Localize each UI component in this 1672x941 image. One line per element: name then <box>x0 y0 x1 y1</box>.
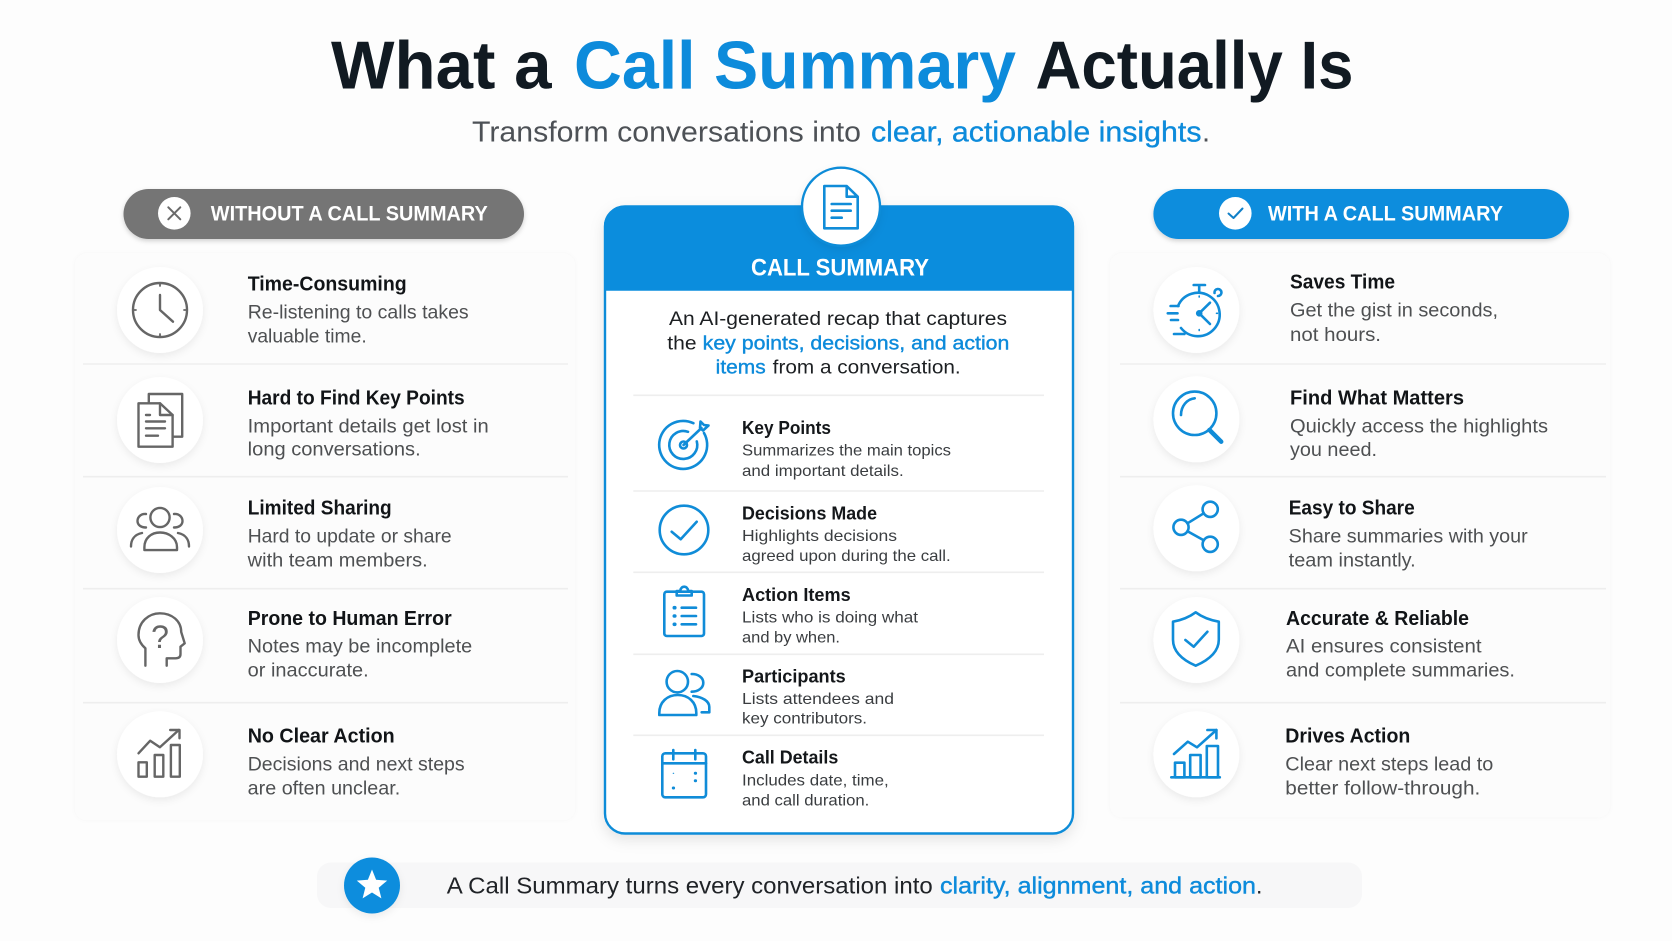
item: participants <box>659 665 894 727</box>
item: hard to find key points: Important details get lost in <box>248 415 489 437</box>
item: key points: Summarizes the main topics <box>742 443 951 460</box>
icon: x mark <box>158 197 191 230</box>
icon: clipboard <box>664 587 704 636</box>
title: What a <box>331 28 553 104</box>
item: prone to human error: or inaccurate. <box>248 660 369 682</box>
icon: calendar <box>662 750 706 797</box>
item: easy to share: Easy to Share <box>1289 496 1415 519</box>
item: drives action: Drives Action <box>1285 725 1410 748</box>
takeaway bar: A Call Summary turns every conversation into <box>447 872 933 898</box>
item: find what matters: Find What Matters <box>1290 386 1464 409</box>
icon: target <box>659 421 708 469</box>
icon: star <box>344 858 400 914</box>
panel: without a call summary <box>75 253 575 820</box>
icon: document badge <box>802 168 880 246</box>
takeaway bar: . <box>1256 872 1262 898</box>
subtitle <box>472 117 1210 149</box>
item: limited sharing: Limited Sharing <box>248 496 392 519</box>
item: call details: Call Details <box>742 747 838 768</box>
icon: check circle <box>660 506 708 554</box>
item: call details: Includes date, time, <box>742 773 889 790</box>
item: no clear action: No Clear Action <box>248 725 395 748</box>
item: no clear action <box>117 711 465 800</box>
item: key points: Key Points <box>742 417 831 438</box>
icon: people <box>659 671 709 715</box>
item: time-consuming: valuable time. <box>248 325 367 347</box>
item: participants: Lists attendees and <box>742 691 894 708</box>
item: find what matters: Quickly access the highlights <box>1290 415 1548 437</box>
icon: team <box>131 508 189 550</box>
title: Call Summary <box>574 28 1016 104</box>
item: find what matters: you need. <box>1290 439 1377 461</box>
icon: magnifier <box>1173 392 1221 442</box>
item: limited sharing: Hard to update or share <box>248 525 452 547</box>
item: limited sharing <box>117 487 452 573</box>
item: saves time: Get the gist in seconds, <box>1290 300 1498 322</box>
title: Actually Is <box>1036 28 1354 104</box>
item: participants: key contributors. <box>742 710 867 727</box>
item: key points <box>659 417 951 480</box>
item: hard to find key points <box>117 377 489 463</box>
item: no clear action: are often unclear. <box>248 778 400 800</box>
icon: share nodes <box>1173 502 1218 552</box>
icon: head with question mark <box>138 613 185 666</box>
badge: without a call summary <box>124 189 524 239</box>
item: drives action <box>1153 711 1493 800</box>
panel: call summary: CALL SUMMARY <box>751 254 929 281</box>
item: time-consuming <box>117 267 469 353</box>
item: decisions made: Decisions Made <box>742 502 877 523</box>
panel: call summary <box>604 168 1074 833</box>
item: decisions made: Highlights decisions <box>742 528 897 545</box>
card header <box>604 206 1074 291</box>
item: saves time <box>1153 267 1498 353</box>
item: participants: Participants <box>742 665 846 686</box>
definition text: items <box>716 356 766 378</box>
item: limited sharing: with team members. <box>247 550 428 572</box>
subtitle: clear, actionable insights <box>871 117 1202 149</box>
item: accurate and reliable <box>1153 597 1515 683</box>
item: action items: and by when. <box>742 630 840 647</box>
item: key points: and important details. <box>742 463 904 480</box>
item: decisions made: agreed upon during the call. <box>742 548 951 565</box>
item: drives action: Clear next steps lead to <box>1285 754 1493 776</box>
item: time-consuming: Time-Consuming <box>248 273 407 296</box>
badge: with a call summary: WITH A CALL SUMMARY <box>1268 203 1503 226</box>
takeaway bar: clarity, alignment, and action <box>940 872 1256 898</box>
icon: stopwatch <box>1168 285 1221 336</box>
title <box>331 28 1354 104</box>
item: action items: Lists who is doing what <box>742 610 919 627</box>
icon: check mark <box>1219 197 1252 230</box>
icon: documents <box>138 394 182 447</box>
badge: without a call summary: WITHOUT A CALL SUMMARY <box>211 203 488 226</box>
item: prone to human error <box>117 597 472 683</box>
badge: with a call summary <box>1153 189 1569 239</box>
panel: with a call summary <box>1110 253 1610 817</box>
icon: clock <box>133 283 187 337</box>
item: prone to human error: Notes may be incomplete <box>248 636 472 658</box>
item: action items: Action Items <box>742 584 851 605</box>
item: prone to human error: Prone to Human Error <box>248 607 452 630</box>
item: easy to share <box>1153 485 1528 572</box>
item: hard to find key points: Hard to Find Key Points <box>248 386 465 409</box>
item: decisions made <box>660 502 951 565</box>
item: no clear action: Decisions and next steps <box>248 754 465 776</box>
item: drives action: better follow-through. <box>1285 778 1480 800</box>
item: hard to find key points: long conversations. <box>248 439 421 461</box>
item: easy to share: team instantly. <box>1289 550 1416 572</box>
item: saves time: not hours. <box>1290 324 1381 346</box>
subtitle: . <box>1202 117 1210 149</box>
definition text: key points, decisions, and action <box>703 332 1009 354</box>
definition text: from a conversation. <box>773 356 961 378</box>
icon: growth chart <box>1171 730 1220 777</box>
item: saves time: Saves Time <box>1290 270 1395 293</box>
icon: head with question mark: ? <box>151 619 169 655</box>
item: accurate and reliable: AI ensures consistent <box>1286 636 1482 658</box>
item: accurate and reliable: and complete summaries. <box>1286 660 1515 682</box>
takeaway bar <box>317 858 1362 914</box>
item: accurate and reliable: Accurate & Reliable <box>1286 607 1469 630</box>
item: easy to share: Share summaries with your <box>1289 525 1528 547</box>
item: action items <box>664 584 919 647</box>
icon: bar chart <box>138 730 180 777</box>
subtitle: Transform conversations into <box>472 117 861 149</box>
item: call details <box>662 747 889 809</box>
item: call details: and call duration. <box>742 792 869 809</box>
item: find what matters <box>1153 376 1548 462</box>
definition text: An AI-generated recap that captures <box>669 308 1007 330</box>
definition text: the <box>667 332 697 354</box>
item: time-consuming: Re-listening to calls takes <box>248 301 469 323</box>
icon: shield <box>1173 612 1219 666</box>
definition text <box>667 308 1009 378</box>
